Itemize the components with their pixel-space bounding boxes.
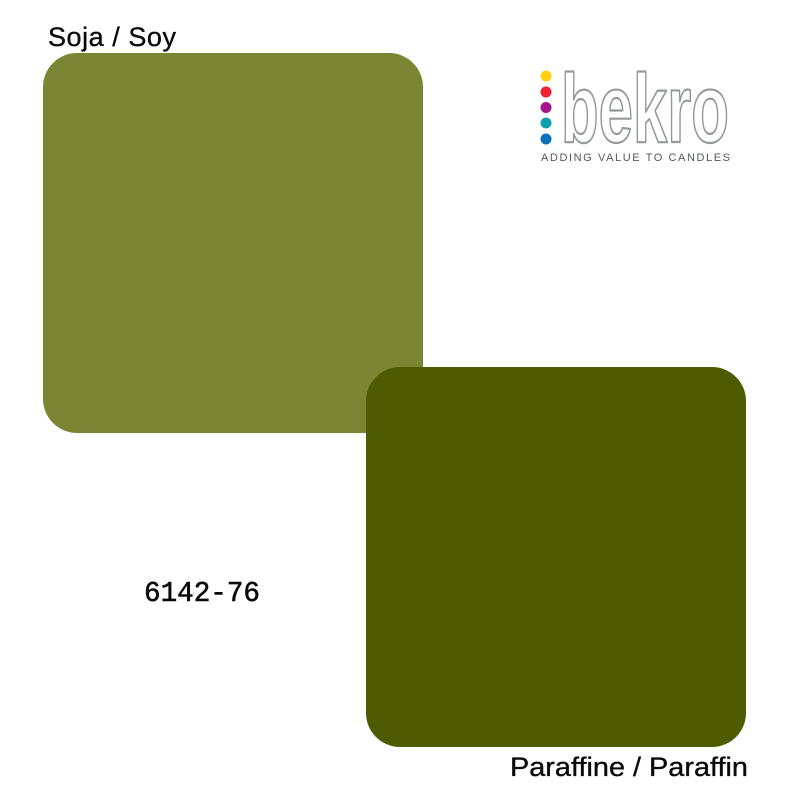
soy colour swatch <box>43 53 423 433</box>
logo tagline: ADDING VALUE TO CANDLES <box>541 152 730 164</box>
bekro logo <box>540 54 730 164</box>
paraffin label: Paraffine / Paraffin <box>510 752 748 782</box>
paraffin colour swatch <box>366 367 746 747</box>
soy label: Soja / Soy <box>48 22 176 52</box>
icon: five coloured dots <box>540 70 552 144</box>
product code: 6142-76 <box>144 577 260 610</box>
